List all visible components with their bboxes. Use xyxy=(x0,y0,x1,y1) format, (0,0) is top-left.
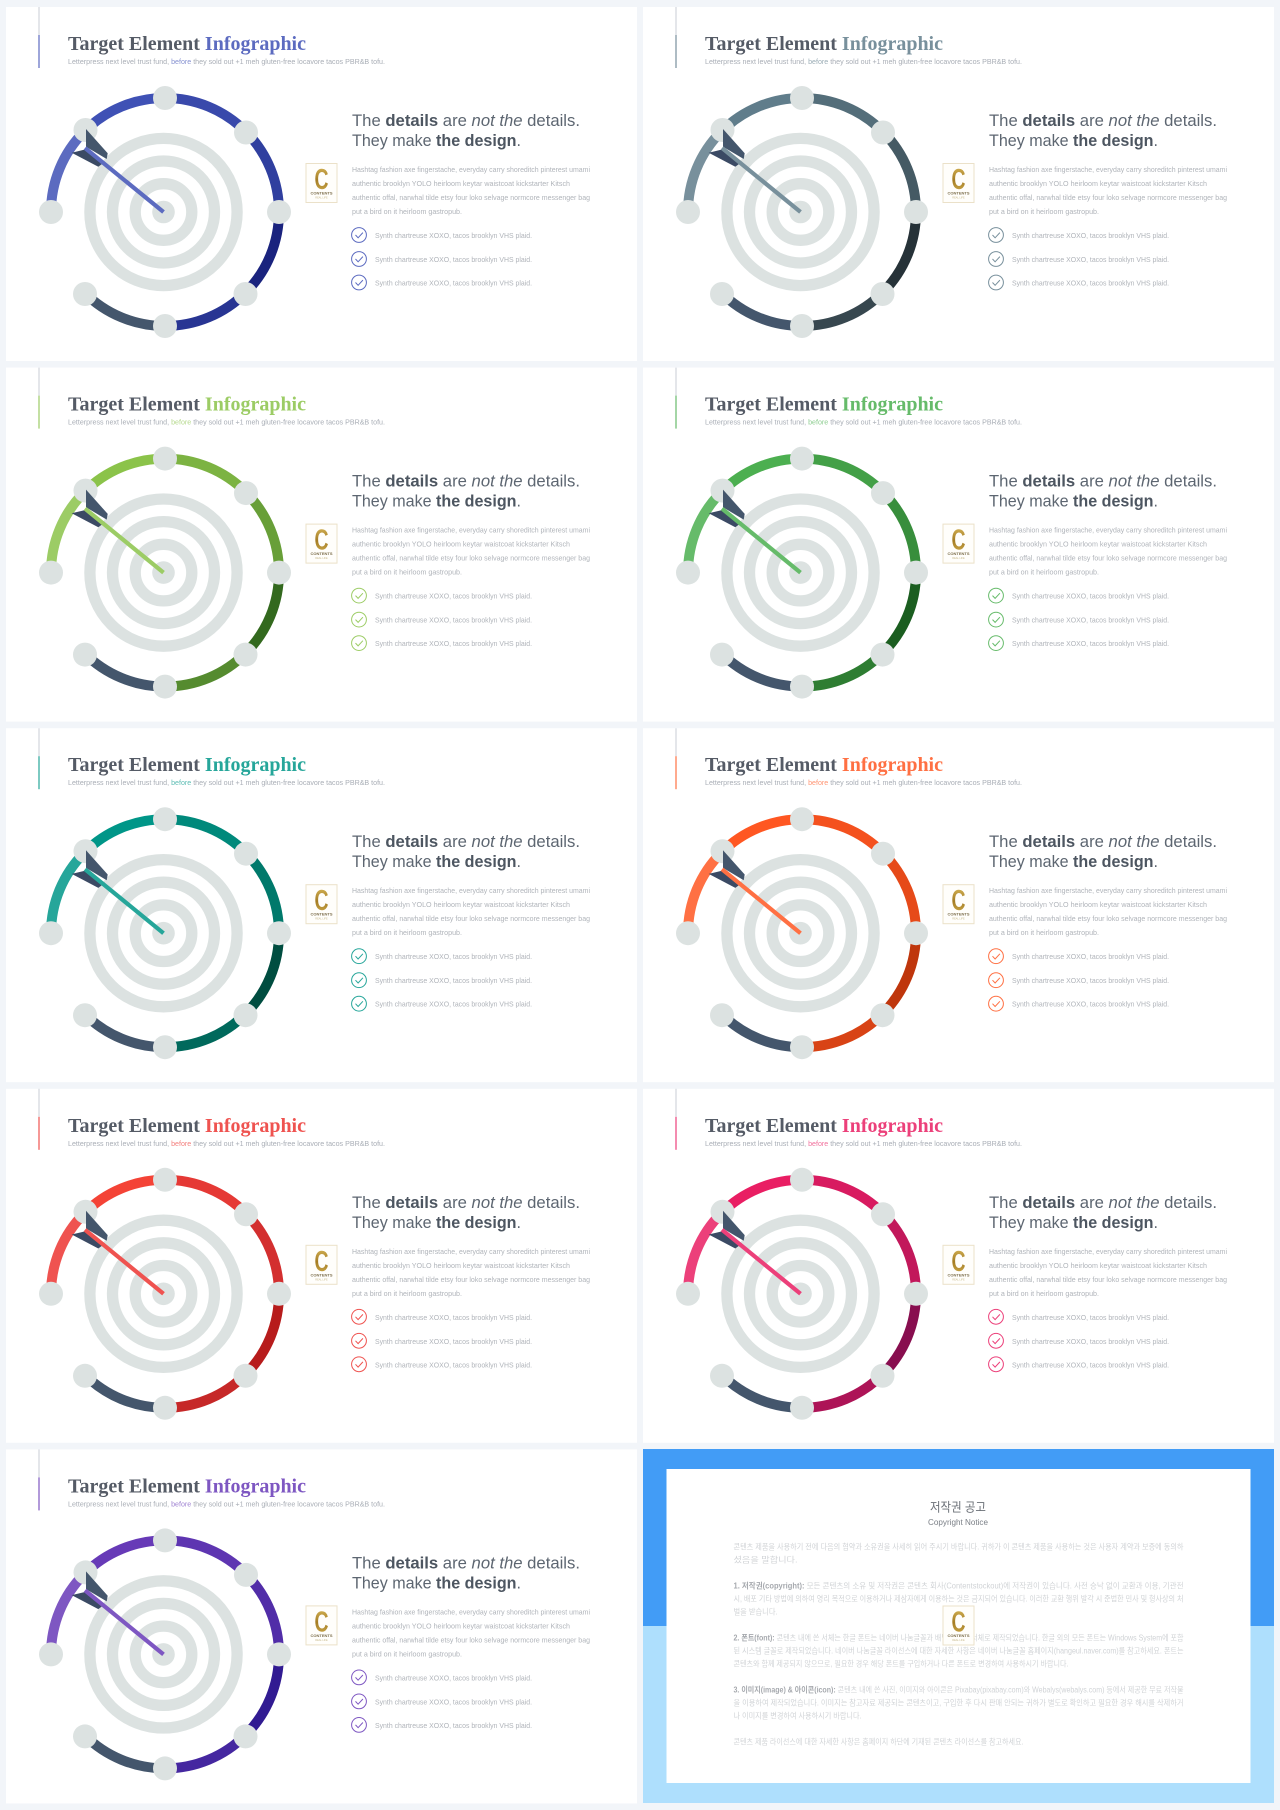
ring with dots xyxy=(39,86,291,338)
notice heading: 저작권 공고 xyxy=(930,1500,986,1514)
logo: C xyxy=(314,1246,329,1278)
logo: C xyxy=(314,164,329,196)
subtitle: Letterpress next level trust fund, before they sold out +1 meh gluten-free locavore tacos PBR&B tofu. xyxy=(68,1499,385,1508)
paragraph: authentic offal, narwhal tilde etsy four loko selvage normcore messenger bag xyxy=(352,554,590,563)
heading: The details are not the details. xyxy=(352,832,580,851)
paragraph: put a bird on it heirloom gastropub. xyxy=(989,207,1099,216)
paragraph: authentic offal, narwhal tilde etsy four loko selvage normcore messenger bag xyxy=(989,914,1227,923)
paragraph: authentic offal, narwhal tilde etsy four loko selvage normcore messenger bag xyxy=(352,1275,590,1284)
logo xyxy=(306,524,337,563)
checklist: Synth chartreuse XOXO, tacos brooklyn VHS plaid. xyxy=(1012,616,1169,625)
logo: CONTENTS xyxy=(310,190,333,196)
heading xyxy=(352,472,580,511)
paragraph xyxy=(352,1247,590,1298)
paragraph: authentic brooklyn YOLO heirloom keytar waistcoat kickstarter Kitsch xyxy=(352,1621,570,1630)
checklist: Synth chartreuse XOXO, tacos brooklyn VHS plaid. xyxy=(375,639,532,648)
heading xyxy=(989,111,1217,150)
logo: CONTENTS xyxy=(310,551,333,556)
logo: REAL LIFE xyxy=(315,1278,328,1281)
paragraph: authentic brooklyn YOLO heirloom keytar waistcoat kickstarter Kitsch xyxy=(352,179,570,188)
checklist: Synth chartreuse XOXO, tacos brooklyn VHS plaid. xyxy=(1012,1337,1169,1346)
notice body text: 1. 저작권(copyright): 모든 콘텐츠의 소유 및 저작권은 콘텐츠 회사(Contentstockout)에 저작권이 있습니다. 사전 승낙 없이 교환과 이용, 기관전 xyxy=(734,1581,1184,1591)
logo: C xyxy=(952,164,966,196)
heading: They make the design. xyxy=(352,131,521,150)
paragraph: put a bird on it heirloom gastropub. xyxy=(989,928,1099,937)
heading xyxy=(352,111,580,150)
heading: They make the design. xyxy=(352,852,521,871)
checklist: Synth chartreuse XOXO, tacos brooklyn VHS plaid. xyxy=(375,1673,532,1682)
title: Target Element Infographic xyxy=(705,33,943,55)
checklist xyxy=(352,228,532,290)
panel: copyright notice xyxy=(643,1449,1274,1803)
paragraph: put a bird on it heirloom gastropub. xyxy=(352,1289,462,1298)
checklist xyxy=(989,588,1169,650)
subtitle: Letterpress next level trust fund, before they sold out +1 meh gluten-free locavore tacos PBR&B tofu. xyxy=(68,778,385,787)
notice heading: Copyright Notice xyxy=(928,1518,989,1527)
heading: The details are not the details. xyxy=(989,832,1217,851)
heading xyxy=(989,472,1217,511)
panel: blue grey target infographic xyxy=(643,7,1274,361)
logo: CONTENTS xyxy=(948,1633,970,1638)
ring with dots xyxy=(676,86,928,338)
notice body text: 콘텐츠 제품 라이선스에 대한 자세한 사항은 홈페이지 하단에 기재된 콘텐츠 라이선스를 참고하세요. xyxy=(734,1737,1024,1747)
title: Target Element Infographic xyxy=(705,754,943,776)
heading: The details are not the details. xyxy=(352,472,580,491)
paragraph: authentic offal, narwhal tilde etsy four loko selvage normcore messenger bag xyxy=(989,554,1227,563)
paragraph: put a bird on it heirloom gastropub. xyxy=(352,568,462,577)
logo xyxy=(306,1606,337,1645)
heading: They make the design. xyxy=(352,1213,521,1232)
notice body text: 된 시스템 글꼴로 제작되었습니다. 네이버 나눔글꼴 라이선스에 대한 자세한 사항은 네이버 나눔글꼴 홈페이지(hangeul.naver.com)를 참고하세요. 폰트는 xyxy=(734,1646,1184,1656)
paragraph: authentic offal, narwhal tilde etsy four loko selvage normcore messenger bag xyxy=(352,914,590,923)
logo: CONTENTS xyxy=(310,1633,333,1638)
heading: They make the design. xyxy=(352,492,521,511)
target rings xyxy=(727,1220,874,1367)
paragraph: authentic offal, narwhal tilde etsy four loko selvage normcore messenger bag xyxy=(989,193,1227,202)
logo: REAL LIFE xyxy=(315,196,328,200)
checklist xyxy=(989,228,1169,290)
icon: arrow xyxy=(709,850,800,933)
heading: They make the design. xyxy=(989,131,1158,150)
logo: CONTENTS xyxy=(948,1272,970,1277)
subtitle: Letterpress next level trust fund, before they sold out +1 meh gluten-free locavore tacos PBR&B tofu. xyxy=(68,1139,385,1148)
title: Target Element Infographic xyxy=(68,33,306,55)
paragraph: put a bird on it heirloom gastropub. xyxy=(989,1289,1099,1298)
ring with dots xyxy=(39,1528,291,1780)
panel: deep purple target infographic xyxy=(6,1449,637,1803)
checklist xyxy=(352,1670,532,1732)
icon: arrow xyxy=(72,1571,164,1654)
checklist: Synth chartreuse XOXO, tacos brooklyn VHS plaid. xyxy=(375,1000,532,1009)
checklist: Synth chartreuse XOXO, tacos brooklyn VHS plaid. xyxy=(1012,592,1169,601)
target rings xyxy=(727,138,874,286)
heading xyxy=(352,1193,580,1232)
ring with dots xyxy=(676,1168,928,1420)
logo xyxy=(306,1245,337,1284)
paragraph: authentic brooklyn YOLO heirloom keytar waistcoat kickstarter Kitsch xyxy=(989,179,1207,188)
logo: C xyxy=(952,1246,966,1278)
paragraph: Hashtag fashion axe fingerstache, everyday carry shoreditch pinterest umami xyxy=(352,1607,590,1616)
target rings xyxy=(90,499,237,646)
panel: green target infographic xyxy=(643,368,1274,722)
checklist: Synth chartreuse XOXO, tacos brooklyn VHS plaid. xyxy=(375,616,532,625)
paragraph: put a bird on it heirloom gastropub. xyxy=(989,568,1099,577)
panel: indigo target infographic xyxy=(6,7,637,361)
icon: arrow xyxy=(72,850,164,933)
subtitle: Letterpress next level trust fund, before they sold out +1 meh gluten-free locavore tacos PBR&B tofu. xyxy=(705,418,1022,427)
icon: arrow xyxy=(709,1211,800,1294)
paragraph xyxy=(989,1247,1227,1298)
logo: REAL LIFE xyxy=(952,196,965,200)
paragraph xyxy=(352,526,590,577)
subtitle: Letterpress next level trust fund, before they sold out +1 meh gluten-free locavore tacos PBR&B tofu. xyxy=(705,57,1022,66)
paragraph: authentic brooklyn YOLO heirloom keytar waistcoat kickstarter Kitsch xyxy=(352,1261,570,1270)
panel: pink target infographic xyxy=(643,1089,1274,1443)
logo: REAL LIFE xyxy=(952,1278,965,1281)
paragraph: Hashtag fashion axe fingerstache, everyday carry shoreditch pinterest umami xyxy=(989,165,1227,174)
logo: REAL LIFE xyxy=(952,918,965,921)
checklist: Synth chartreuse XOXO, tacos brooklyn VHS plaid. xyxy=(1012,1313,1169,1322)
icon: arrow xyxy=(72,490,164,573)
title: Target Element Infographic xyxy=(68,394,306,416)
target rings xyxy=(90,138,237,286)
notice body text xyxy=(734,1542,1184,1747)
paragraph xyxy=(352,165,590,216)
paragraph: put a bird on it heirloom gastropub. xyxy=(352,1649,462,1658)
notice body text: 3. 이미지(image) & 아이콘(icon): 콘텐츠 내에 쓴 사진, 이미지와 아이콘은 Pixabay(pixabay.com)와 Webalys(webalys.com) 등에서 제공한 무료 저작물 xyxy=(734,1685,1184,1695)
icon: arrow xyxy=(709,129,800,212)
logo: C xyxy=(952,885,966,917)
checklist: Synth chartreuse XOXO, tacos brooklyn VHS plaid. xyxy=(375,952,532,961)
paragraph: Hashtag fashion axe fingerstache, everyday carry shoreditch pinterest umami xyxy=(352,1247,590,1256)
logo xyxy=(943,524,974,563)
checklist: Synth chartreuse XOXO, tacos brooklyn VHS plaid. xyxy=(1012,231,1169,240)
paragraph: authentic offal, narwhal tilde etsy four loko selvage normcore messenger bag xyxy=(352,1635,590,1644)
paragraph: authentic offal, narwhal tilde etsy four loko selvage normcore messenger bag xyxy=(989,1275,1227,1284)
logo: C xyxy=(952,1606,966,1638)
paragraph: authentic brooklyn YOLO heirloom keytar waistcoat kickstarter Kitsch xyxy=(352,900,570,909)
checklist xyxy=(352,949,532,1011)
heading: They make the design. xyxy=(989,492,1158,511)
target rings xyxy=(727,499,874,646)
paragraph xyxy=(352,1607,590,1658)
target rings xyxy=(727,860,874,1007)
paragraph: authentic brooklyn YOLO heirloom keytar waistcoat kickstarter Kitsch xyxy=(989,1261,1207,1270)
heading: The details are not the details. xyxy=(989,472,1217,491)
paragraph: Hashtag fashion axe fingerstache, everyday carry shoreditch pinterest umami xyxy=(989,1247,1227,1256)
checklist: Synth chartreuse XOXO, tacos brooklyn VHS plaid. xyxy=(1012,255,1169,264)
checklist: Synth chartreuse XOXO, tacos brooklyn VHS plaid. xyxy=(375,1721,532,1730)
paragraph: Hashtag fashion axe fingerstache, everyday carry shoreditch pinterest umami xyxy=(352,886,590,895)
paragraph xyxy=(989,165,1227,216)
icon: arrow xyxy=(72,129,164,212)
checklist: Synth chartreuse XOXO, tacos brooklyn VHS plaid. xyxy=(375,255,532,264)
heading: The details are not the details. xyxy=(989,111,1217,130)
title: Target Element Infographic xyxy=(705,1115,943,1137)
paragraph: authentic brooklyn YOLO heirloom keytar waistcoat kickstarter Kitsch xyxy=(352,540,570,549)
heading xyxy=(989,832,1217,871)
checklist: Synth chartreuse XOXO, tacos brooklyn VHS plaid. xyxy=(375,592,532,601)
notice body text: 콘텐츠와 함께 제공되지 않으므로, 필요한 경우 해당 폰트를 구입하거나 다른 폰트로 변경하여 사용하시기 바랍니다. xyxy=(734,1658,1068,1668)
logo xyxy=(306,885,337,924)
logo: C xyxy=(952,525,966,557)
target rings xyxy=(90,1220,237,1367)
ring with dots xyxy=(39,807,291,1059)
paragraph xyxy=(352,886,590,937)
panel: red target infographic xyxy=(6,1089,637,1443)
ring with dots xyxy=(676,807,928,1059)
icon: arrow xyxy=(709,490,800,573)
paragraph: Hashtag fashion axe fingerstache, everyday carry shoreditch pinterest umami xyxy=(989,526,1227,535)
logo: REAL LIFE xyxy=(315,1639,328,1642)
notice body text: 나 이미지를 변경하여 사용하시기 바랍니다. xyxy=(734,1711,862,1721)
heading: The details are not the details. xyxy=(989,1193,1217,1212)
paragraph: put a bird on it heirloom gastropub. xyxy=(352,207,462,216)
paragraph: put a bird on it heirloom gastropub. xyxy=(352,928,462,937)
logo: C xyxy=(314,1606,329,1638)
paragraph xyxy=(989,526,1227,577)
logo: REAL LIFE xyxy=(952,557,965,560)
logo: CONTENTS xyxy=(310,1272,333,1277)
paragraph: authentic brooklyn YOLO heirloom keytar waistcoat kickstarter Kitsch xyxy=(989,900,1207,909)
paragraph: Hashtag fashion axe fingerstache, everyday carry shoreditch pinterest umami xyxy=(352,526,590,535)
checklist: Synth chartreuse XOXO, tacos brooklyn VHS plaid. xyxy=(375,1697,532,1706)
checklist: Synth chartreuse XOXO, tacos brooklyn VHS plaid. xyxy=(375,1313,532,1322)
heading: The details are not the details. xyxy=(352,1193,580,1212)
checklist: Synth chartreuse XOXO, tacos brooklyn VHS plaid. xyxy=(1012,1000,1169,1009)
paragraph: Hashtag fashion axe fingerstache, everyday carry shoreditch pinterest umami xyxy=(989,886,1227,895)
logo: C xyxy=(314,885,329,917)
checklist: Synth chartreuse XOXO, tacos brooklyn VHS plaid. xyxy=(375,976,532,985)
checklist: Synth chartreuse XOXO, tacos brooklyn VHS plaid. xyxy=(1012,952,1169,961)
logo: REAL LIFE xyxy=(315,918,328,921)
panel: deep orange target infographic xyxy=(643,728,1274,1082)
checklist xyxy=(352,588,532,650)
checklist: Synth chartreuse XOXO, tacos brooklyn VHS plaid. xyxy=(375,1337,532,1346)
heading: They make the design. xyxy=(989,852,1158,871)
checklist: Synth chartreuse XOXO, tacos brooklyn VHS plaid. xyxy=(375,231,532,240)
paragraph: authentic brooklyn YOLO heirloom keytar waistcoat kickstarter Kitsch xyxy=(989,540,1207,549)
checklist xyxy=(989,1309,1169,1372)
logo xyxy=(943,164,974,202)
title: Target Element Infographic xyxy=(705,394,943,416)
heading xyxy=(352,832,580,871)
heading: They make the design. xyxy=(989,1213,1158,1232)
logo: REAL LIFE xyxy=(952,1639,965,1642)
subtitle: Letterpress next level trust fund, before they sold out +1 meh gluten-free locavore tacos PBR&B tofu. xyxy=(68,418,385,427)
icon: arrow xyxy=(72,1211,164,1294)
ring with dots xyxy=(676,447,928,699)
ring with dots xyxy=(39,1168,291,1420)
notice body text: 셨음을 말합니다. xyxy=(734,1554,798,1564)
target rings xyxy=(90,1581,237,1728)
logo: REAL LIFE xyxy=(315,557,328,560)
checklist: Synth chartreuse XOXO, tacos brooklyn VHS plaid. xyxy=(1012,278,1169,288)
checklist: Synth chartreuse XOXO, tacos brooklyn VHS plaid. xyxy=(1012,639,1169,648)
title: Target Element Infographic xyxy=(68,1475,306,1497)
notice body text: 2. 폰트(font): 콘텐츠 내에 쓴 서체는 한글 폰트는 네이버 나눔글꼴과 배달의 민족 서체로 제작되었습니다. 한글 외의 모든 폰트는 Windows System에 포함 xyxy=(734,1633,1184,1643)
ring with dots xyxy=(39,447,291,699)
heading xyxy=(989,1193,1217,1232)
panel: light green target infographic xyxy=(6,368,637,722)
heading: They make the design. xyxy=(352,1573,521,1592)
paragraph xyxy=(989,886,1227,937)
heading: The details are not the details. xyxy=(352,1553,580,1572)
title: Target Element Infographic xyxy=(68,754,306,776)
logo xyxy=(943,1245,974,1284)
paragraph: authentic offal, narwhal tilde etsy four loko selvage normcore messenger bag xyxy=(352,193,590,202)
logo: CONTENTS xyxy=(948,912,970,917)
logo: CONTENTS xyxy=(948,551,970,556)
logo: CONTENTS xyxy=(948,190,970,196)
logo xyxy=(943,885,974,924)
notice body text: 시, 배포 기타 방법에 의하여 영리 목적으로 이용하거나 제삼자에게 이용하는 것은 금지되어 있습니다. 이러한 교환 행위 발각 시 준법한 민사 및 형사상의 처 xyxy=(734,1593,1184,1603)
subtitle: Letterpress next level trust fund, before they sold out +1 meh gluten-free locavore tacos PBR&B tofu. xyxy=(705,1139,1022,1148)
logo xyxy=(943,1606,974,1645)
subtitle: Letterpress next level trust fund, before they sold out +1 meh gluten-free locavore tacos PBR&B tofu. xyxy=(705,778,1022,787)
paragraph: Hashtag fashion axe fingerstache, everyday carry shoreditch pinterest umami xyxy=(352,165,590,174)
notice body text: 벌을 받습니다. xyxy=(734,1607,778,1617)
subtitle: Letterpress next level trust fund, before they sold out +1 meh gluten-free locavore tacos PBR&B tofu. xyxy=(68,57,385,66)
notice body text: 콘텐츠 제품을 사용하기 전에 다음의 협약과 소유권을 사세히 읽어 주시기 바랍니다. 귀하가 이 콘텐츠 제품을 사용하는 것은 사용자 계약과 보증에 동의하 xyxy=(734,1542,1184,1552)
checklist: Synth chartreuse XOXO, tacos brooklyn VHS plaid. xyxy=(1012,976,1169,985)
notice body text: 을 이용하여 제작되었습니다. 이미지는 참고자료 제공되는 콘텐츠이고, 구입한 후 다시 판매 안되는 귀하가 별도로 확인하고 필요한 경우 해시를 삭제하거 xyxy=(734,1698,1184,1708)
heading: The details are not the details. xyxy=(352,111,580,130)
checklist: Synth chartreuse XOXO, tacos brooklyn VHS plaid. xyxy=(1012,1360,1169,1369)
checklist: Synth chartreuse XOXO, tacos brooklyn VHS plaid. xyxy=(375,1360,532,1369)
checklist xyxy=(989,949,1169,1011)
panel: teal target infographic xyxy=(6,728,637,1082)
target rings xyxy=(90,860,237,1007)
checklist xyxy=(352,1309,532,1372)
notice heading xyxy=(928,1500,989,1527)
title: Target Element Infographic xyxy=(68,1115,306,1137)
checklist: Synth chartreuse XOXO, tacos brooklyn VHS plaid. xyxy=(375,278,532,288)
logo: C xyxy=(314,525,329,557)
heading xyxy=(352,1553,580,1592)
logo xyxy=(306,164,337,202)
logo: CONTENTS xyxy=(310,912,333,917)
